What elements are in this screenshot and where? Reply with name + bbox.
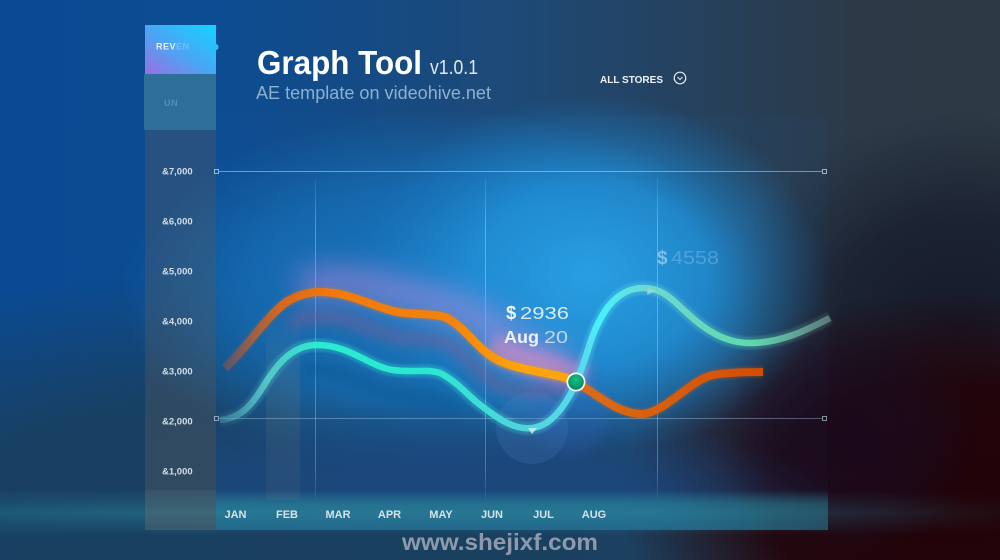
x axis labels: JAN <box>224 509 247 521</box>
callout: 2936: 2936 <box>520 303 569 323</box>
y axis labels: &4,000 <box>162 316 193 328</box>
x axis labels <box>224 509 606 521</box>
panel: sidebar <box>145 130 216 530</box>
tab: revenue <box>145 25 218 74</box>
x axis labels: MAR <box>325 509 351 521</box>
x axis labels: JUN <box>481 509 503 521</box>
callout: 2936: $ <box>506 302 517 323</box>
y axis labels: &6,000 <box>162 216 193 228</box>
cyan line shadow <box>300 370 460 410</box>
x axis labels: JUL <box>533 509 554 521</box>
x axis labels: APR <box>378 509 401 521</box>
y axis labels: &7,000 <box>162 166 193 178</box>
bottom glow band <box>0 492 1000 532</box>
store selector <box>600 72 686 86</box>
pink glow behind orange line <box>300 282 585 378</box>
callout: 4558 <box>657 248 719 269</box>
title: v1.0.1 <box>430 57 478 79</box>
y axis labels <box>162 166 193 478</box>
x axis labels: MAY <box>429 509 453 521</box>
y axis labels: &3,000 <box>162 366 193 378</box>
callout: 2936: 20 <box>544 327 568 347</box>
callout: 4558: 4558 <box>671 248 719 268</box>
units line: cyan <box>220 288 830 434</box>
title: Graph Tool <box>257 44 422 81</box>
subtitle: AE template on videohive.net <box>256 83 491 103</box>
grid lines <box>214 170 826 500</box>
y axis labels: &2,000 <box>162 416 193 428</box>
callout: 4558: $ <box>657 248 668 269</box>
x axis labels: AUG <box>582 509 606 521</box>
revenue line: orange <box>225 292 763 414</box>
tab: unit: UN <box>164 98 178 108</box>
orange line shadow <box>290 317 568 391</box>
y axis labels: &5,000 <box>162 266 193 278</box>
marker dot <box>566 372 586 392</box>
y axis labels: &1,000 <box>162 466 193 478</box>
x axis labels: FEB <box>276 509 298 521</box>
february hatch highlight <box>266 310 300 500</box>
store selector: ALL STORES <box>600 74 663 86</box>
watermark: www.shejixf.com <box>401 529 598 555</box>
callout: 2936: Aug <box>504 327 539 347</box>
panel: chart area <box>120 95 980 560</box>
july highlight circle <box>496 355 610 464</box>
tab: unit <box>144 74 216 130</box>
tab: revenue: REVEN <box>156 42 190 52</box>
callout: 2936 <box>504 302 569 347</box>
